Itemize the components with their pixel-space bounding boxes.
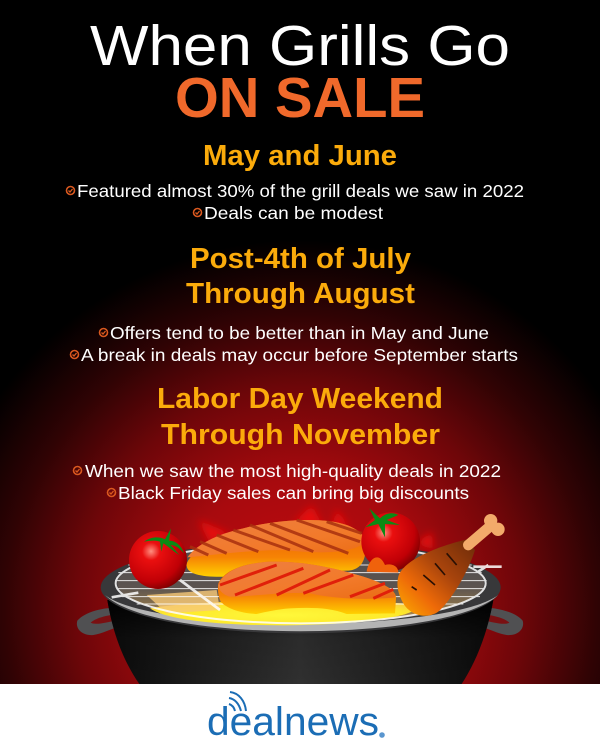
bullet: modest deals: Deals can be modest <box>204 203 383 223</box>
back steak <box>187 520 365 577</box>
heading: Labor Day Weekend Through November: Through November <box>161 419 440 451</box>
heading: Labor Day Weekend Through November: Labor Day Weekend <box>157 383 443 415</box>
tomato left <box>129 528 187 589</box>
flames behind food <box>198 505 433 550</box>
section: May and June <box>66 140 524 223</box>
title <box>90 14 510 130</box>
rim highlight <box>105 595 498 631</box>
bullet: Black Friday: Black Friday sales can bring big discounts <box>118 483 469 503</box>
chicken char marks <box>412 553 457 590</box>
title: ON SALE <box>175 66 425 130</box>
registered mark <box>379 732 385 738</box>
tomato right <box>361 508 420 571</box>
heading: Labor Day Weekend Through November <box>157 383 443 451</box>
chicken leg <box>397 514 505 616</box>
title: When Grills Go <box>90 14 510 78</box>
heading: Post-4th of July Through August <box>186 243 415 310</box>
heading: May and June: May and June <box>203 140 397 172</box>
dealnews logo: dealnews <box>207 700 379 744</box>
grill handles <box>77 607 523 635</box>
section: Post-4th of July <box>70 243 518 365</box>
heading: Post-4th of July Through August: Through August <box>186 278 415 310</box>
bullet: better offers: Offers tend to be better than in May and June <box>110 323 489 343</box>
cooking grate <box>112 543 502 623</box>
illustration: grill with food <box>77 505 523 684</box>
footer band <box>0 684 600 750</box>
heading: Post-4th of July Through August: Post-4th of July <box>190 243 411 275</box>
chicken bone <box>468 525 492 545</box>
fire glow <box>150 600 417 625</box>
signal waves icon <box>229 692 246 711</box>
fire over right tomato <box>367 557 398 573</box>
grill rim <box>101 541 501 633</box>
bullet: high-quality deals: When we saw the most high-quality deals in 2022 <box>85 461 501 481</box>
grill bowl <box>107 600 493 684</box>
bullet: break in deals: A break in deals may occur before September starts <box>81 345 518 365</box>
front steak <box>218 562 396 614</box>
section: Labor Day <box>74 383 501 503</box>
fire bed <box>117 543 484 624</box>
bullet: 30 percent of deals: Featured almost 30% of the grill deals we saw in 2022 <box>77 181 524 201</box>
